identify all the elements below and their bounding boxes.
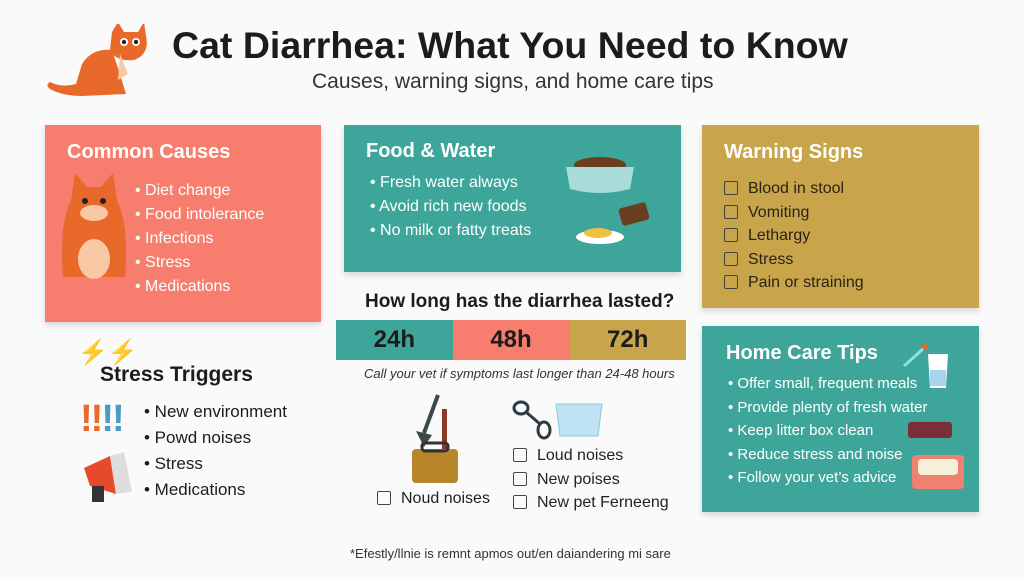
list: food & water [370,174,531,239]
title: Cat Diarrhea: What You Need to Know [172,24,848,66]
list: warning signs: Vomiting [748,204,809,220]
icon: sitting cat [62,173,126,279]
list: home care tips: • Provide plenty of fresh water [728,398,928,416]
list: stress triggers: • Powd noises [144,428,251,447]
heading: home care tips: Home Care Tips [726,342,878,364]
checklist: left: Noud noises [401,490,490,507]
list: home care tips: • Follow your vet’s advice [728,469,896,486]
list: food & water: • Fresh water always [370,174,518,191]
icon: lightning: ⚡⚡ [78,339,138,366]
heading: common causes: Common Causes [67,141,230,163]
list: stress triggers: • New environment [144,402,287,421]
list: food & water: • Avoid rich new foods [370,198,527,215]
caption: Call your vet if symptoms last longer than 24-48 hours [364,366,675,381]
list: stress triggers: • Medications [144,480,245,499]
question heading: How long has the diarrhea lasted? [365,291,674,312]
list: warning signs: Lethargy [748,227,810,244]
timeline bar: 24h [374,326,415,353]
icon: food bowl [566,157,650,244]
timeline bar: 48h [490,326,532,353]
heading: food & water: Food & Water [366,140,495,162]
list: warning signs [724,180,864,291]
timeline bar [336,320,686,360]
checklist: right [513,447,669,511]
icon: exclamation marks: !!!! [80,398,123,440]
footnote: *Efestly/llnie is remnt apmos out/en daiandering mi sare [350,546,671,561]
panel: warning signs [702,125,979,308]
subtitle: Causes, warning signs, and home care tips [312,70,714,93]
checklist: right: Loud noises [537,447,623,464]
icon: megaphone [84,452,132,502]
checklist: right: New pet Ferneeng [537,494,669,511]
heading: stress triggers: Stress Triggers [100,363,253,386]
list: home care tips: • Keep litter box clean [728,422,873,439]
checklist: right: New poises [537,470,620,488]
list: causes: • Food intolerance [135,206,264,223]
list: home care tips: • Offer small, frequent meals [728,375,917,392]
list: stress triggers [144,402,287,499]
list: causes [135,182,264,295]
panel: food & water [344,125,681,272]
list: warning signs: Blood in stool [748,180,844,197]
icon: cat [47,24,147,96]
list: causes: • Infections [135,230,214,247]
icon: glass and dropper [903,344,948,388]
heading: warning signs: Warning Signs [724,141,863,163]
list: home care tips [728,375,928,486]
list: causes: • Stress [135,254,190,271]
list: warning signs: Stress [748,250,793,268]
list: warning signs: Pain or straining [748,274,864,291]
stress triggers section [78,338,287,502]
icon: pet bed [912,455,964,489]
panel: common causes [45,125,321,322]
icon: spoon and water bowl [512,400,602,440]
panel: home care tips [702,326,979,512]
icon: litter box [908,422,952,438]
timeline bar: 72h [607,326,648,353]
list: stress triggers: • Stress [144,454,203,473]
list: home care tips: • Reduce stress and noise [728,446,903,462]
list: food & water: • No milk or fatty treats [370,222,531,239]
list: causes: • Medications [135,278,230,295]
icon: suitcase [412,394,458,483]
list: causes: • Diet change [135,182,230,199]
